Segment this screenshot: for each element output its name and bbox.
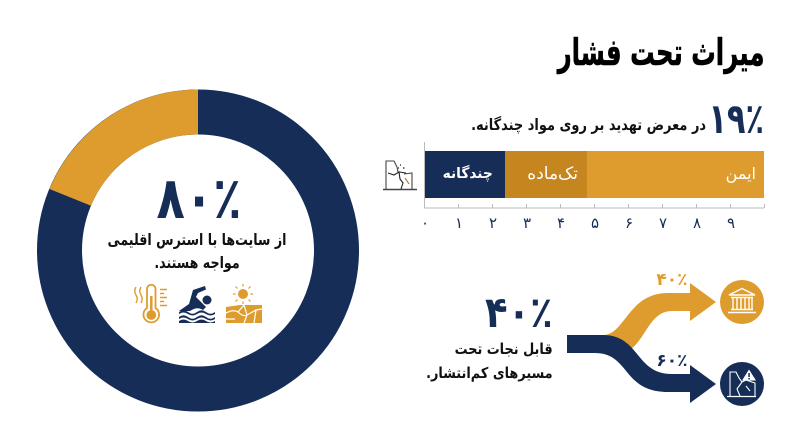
axis labels: ۱ [455, 214, 463, 232]
arrow: gold [600, 283, 716, 353]
bar label: safe: ایمن [726, 164, 756, 183]
segment: multiple [424, 151, 505, 198]
bar heading: در معرض تهدید بر روی مواد چندگانه. [471, 116, 706, 134]
axis labels: ۵ [591, 214, 599, 232]
donut caption: از سایت‌ها با استرس اقلیمی [108, 230, 286, 249]
bar label: multiple: چندگانه [443, 166, 493, 182]
axis labels: ۷ [659, 214, 667, 232]
label: 60 percent: ۶۰٪ [656, 351, 688, 371]
title: ميراث تحت فشار [557, 31, 764, 74]
donut caption: مواجه هستند. [154, 253, 240, 272]
axis labels: ۰ [421, 214, 429, 232]
axis labels: ۸ [693, 214, 701, 232]
stat caption [426, 340, 553, 382]
label: 40 percent: ۴۰٪ [656, 270, 688, 290]
segment: safe [587, 151, 764, 198]
bar label: single: تک‌ماده [527, 164, 578, 184]
donut caption [108, 230, 286, 272]
stat: 19 percent: ۱۹٪ [709, 94, 764, 143]
segment: single [505, 151, 587, 198]
arrow: navy [567, 335, 716, 403]
axis labels: ۶ [625, 214, 633, 232]
axis labels: ۳ [523, 214, 531, 232]
donut value: ۸۰٪ [157, 164, 241, 232]
axis labels [421, 214, 735, 232]
stat caption: مسیرهای کم‌انتشار. [426, 364, 553, 382]
axis labels: ۹ [727, 214, 735, 232]
stat caption: قابل نجات تحت [455, 340, 553, 358]
stat: 40 percent: ۴۰٪ [485, 288, 553, 338]
axis labels: ۴ [557, 214, 565, 232]
axis labels: ۲ [489, 214, 497, 232]
